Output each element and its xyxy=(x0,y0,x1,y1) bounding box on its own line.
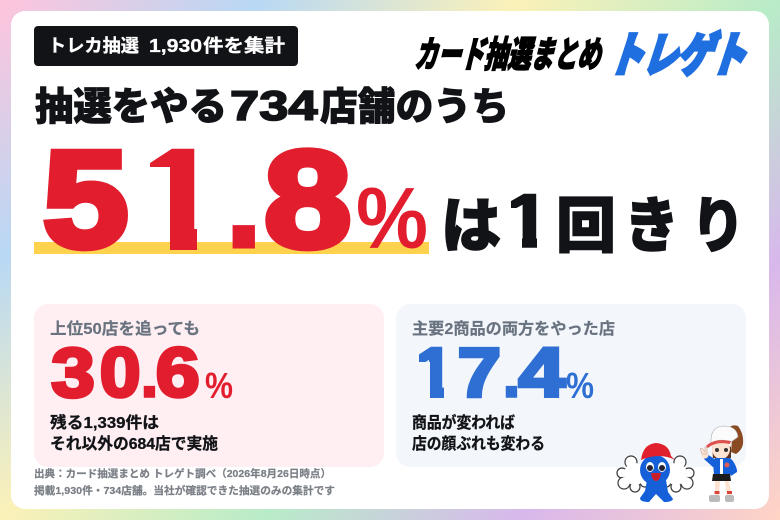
panel number xyxy=(419,346,567,398)
panel number: 7 xyxy=(458,333,501,412)
panel number: 3 xyxy=(51,333,95,412)
source note: 掲載1,930件・734店舗。当社が確認できた抽選のみの集計です xyxy=(34,484,335,497)
logo: カード抽選まとめ トレゲト xyxy=(412,30,757,82)
yellow underline xyxy=(34,242,429,254)
panel number: 6 xyxy=(156,333,200,411)
panel: top 50 stores xyxy=(34,304,384,467)
big number: 1 xyxy=(140,124,216,276)
big number xyxy=(43,147,350,252)
badge: total count: 件を集計 xyxy=(203,36,285,56)
panel text: 店の顔ぶれも変わる xyxy=(412,434,545,453)
panel text xyxy=(50,413,218,453)
panel percent: % xyxy=(566,365,594,406)
icon: girl mascot in blue jacket xyxy=(700,425,743,502)
badge: total count: トレカ抽選 xyxy=(48,36,139,56)
percent sign: % xyxy=(356,171,428,267)
heading: 店舗のうち xyxy=(320,86,509,129)
headline suffix xyxy=(445,194,736,254)
badge: total count xyxy=(34,26,298,66)
panel number: . xyxy=(140,334,159,412)
panel text: それ以外の684店で実施 xyxy=(50,434,218,453)
panel percent: % xyxy=(205,365,233,406)
panel number: 0 xyxy=(100,334,141,412)
panel number xyxy=(51,333,200,412)
panel number: 1 xyxy=(414,334,453,412)
badge: total count: 1,930 xyxy=(149,36,202,56)
panel: both products xyxy=(396,304,746,467)
headline suffix: は xyxy=(441,193,501,260)
logo: カード抽選まとめ トレゲト: カード抽選まとめ xyxy=(412,35,608,75)
panel text: 残る1,339件は xyxy=(50,413,159,432)
panel label: 主要2商品の両方をやった店 xyxy=(412,319,615,338)
big number: 5 xyxy=(43,122,128,276)
left cloud hand xyxy=(617,456,650,492)
headline statistic: 51.8% は1回きり xyxy=(34,147,736,254)
panel text: 商品が変われば xyxy=(412,413,515,432)
source note xyxy=(34,467,335,497)
panel number: . xyxy=(502,334,521,412)
panel label: 上位50店を追っても xyxy=(50,320,200,338)
right cloud hand xyxy=(661,456,694,492)
heading: 734 xyxy=(230,83,318,130)
headline suffix: き xyxy=(624,194,679,261)
heading: 抽選をやる xyxy=(35,86,227,129)
icon: blue mascot with red cap xyxy=(617,443,694,502)
headline suffix: り xyxy=(691,193,745,261)
big number: . xyxy=(225,124,263,277)
headline suffix: 1 xyxy=(503,179,552,264)
big number: 8 xyxy=(264,123,351,276)
source note: 出典：カード抽選まとめ トレゲト調べ（2026年8月26日時点） xyxy=(34,467,331,480)
panel text xyxy=(412,413,545,453)
heading xyxy=(35,83,509,130)
panel number: 4 xyxy=(518,334,565,412)
headline suffix: 回 xyxy=(556,193,616,260)
